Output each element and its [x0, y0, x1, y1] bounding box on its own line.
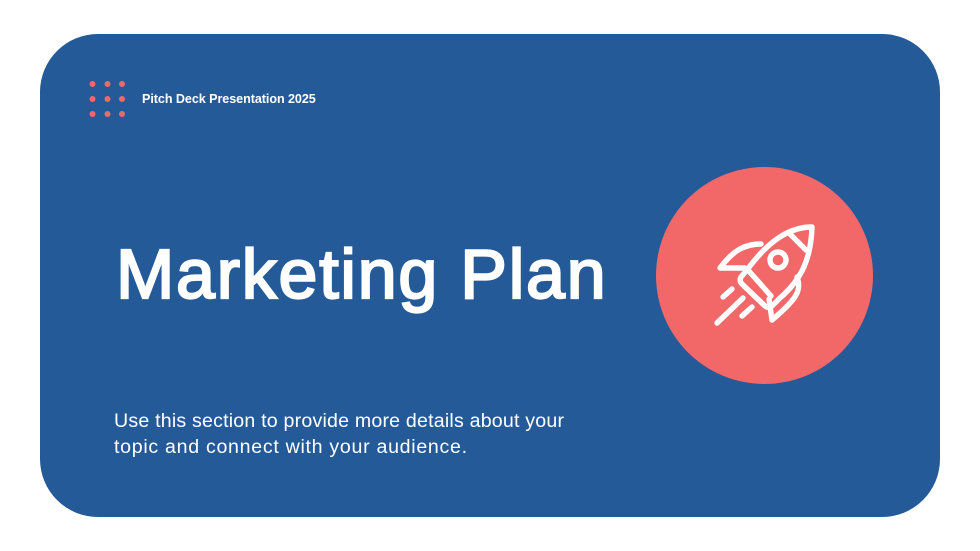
text block: description	[114, 410, 564, 458]
text block: description: Use this section to provide more details about your	[114, 410, 564, 432]
heading: deck label: Pitch Deck Presentation 2025	[142, 92, 316, 106]
title: Marketing Plan	[116, 235, 607, 313]
text block: description: topic and connect with your audience.	[114, 436, 468, 458]
